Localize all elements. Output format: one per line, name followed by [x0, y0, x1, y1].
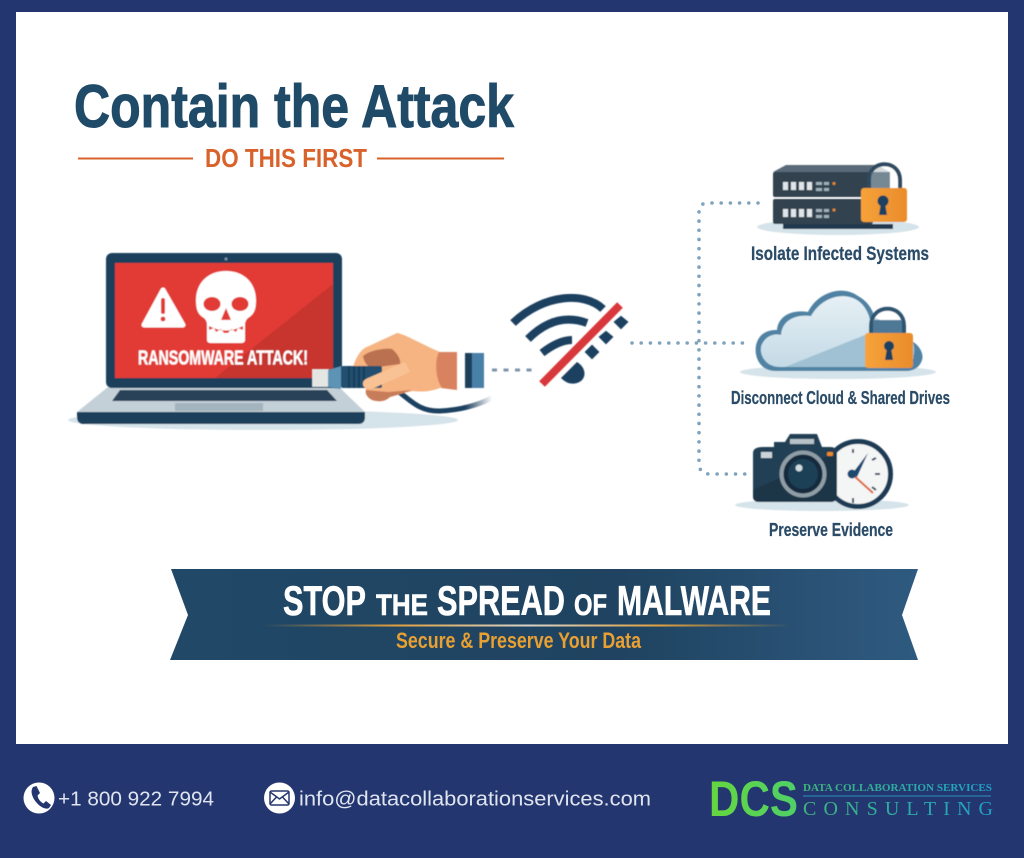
icon: cloud with padlock: [740, 291, 936, 379]
banner headline: OF: [574, 589, 607, 622]
banner headline: MALWARE: [617, 577, 771, 624]
thumb: [363, 362, 410, 388]
illustration: laptop with ransomware screen: [68, 253, 458, 430]
cable stub: [465, 353, 484, 388]
banner headline: THE: [376, 589, 428, 622]
footer: email: info@datacollaborationservices.com: [299, 788, 651, 810]
banner headline: [283, 577, 771, 624]
screen message: RANSOMWARE ATTACK!: [138, 348, 308, 370]
footer: phone: [24, 782, 214, 814]
footer: logo: CONSULTING: [803, 798, 993, 820]
label: preserve evidence: Preserve Evidence: [769, 520, 893, 540]
footer: logo: [709, 771, 993, 827]
screen: [115, 263, 333, 378]
hand: [353, 333, 457, 401]
label: isolate infected systems: Isolate Infected Systems: [751, 244, 929, 265]
laptop lid: [106, 253, 342, 388]
icon: server with padlock: [757, 164, 919, 235]
keyboard: [112, 390, 337, 401]
connector: dotted lines to actions: [632, 203, 758, 474]
banner headline: SPREAD: [437, 577, 565, 624]
footer: email: [264, 782, 651, 814]
title: Contain the Attack: [74, 73, 515, 140]
subtitle: do this first: DO THIS FIRST: [205, 143, 367, 173]
footer: logo: DCS: [709, 771, 798, 827]
banner subheading: Secure & Preserve Your Data: [396, 628, 642, 653]
icon: wifi disconnected: [513, 298, 627, 384]
cable: [385, 385, 492, 411]
icon: camera with clock: [735, 434, 909, 511]
banner: [170, 569, 918, 660]
warning triangle: [144, 290, 183, 325]
skull: [196, 271, 256, 343]
banner headline: STOP: [283, 577, 366, 624]
footer: phone: +1 800 922 7994: [58, 788, 214, 810]
plug: [312, 369, 329, 387]
footer: logo: DATA COLLABORATION SERVICES: [803, 783, 992, 794]
dashes: [492, 368, 537, 372]
illustration: hand unplugging network cable: [312, 333, 537, 411]
laptop base: [77, 387, 365, 424]
